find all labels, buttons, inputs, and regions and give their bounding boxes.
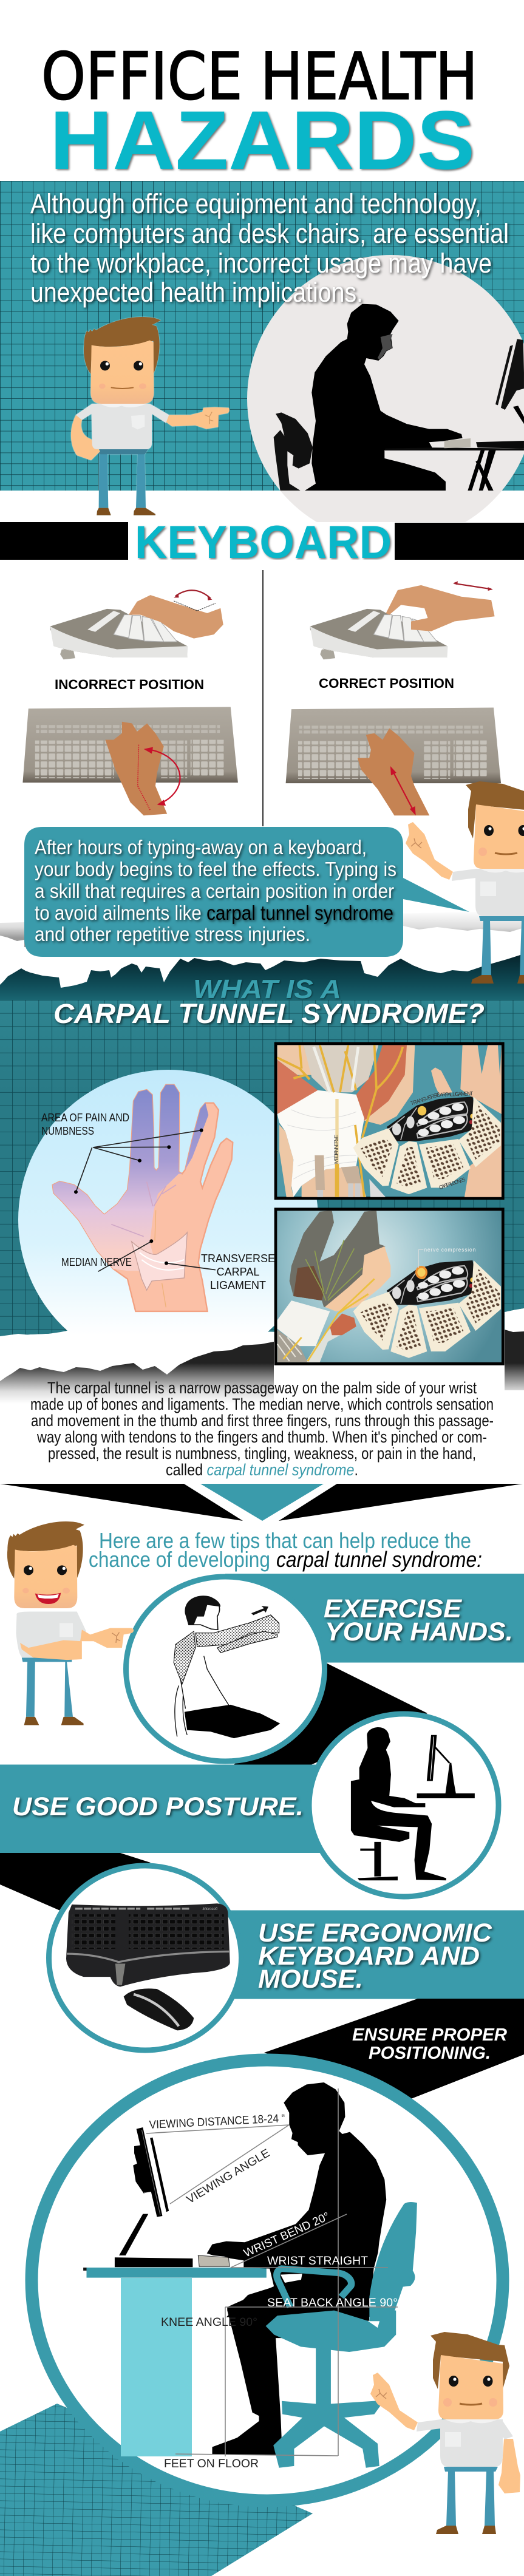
keyboard heading bar	[0, 517, 524, 568]
tip 1 text, second line: YOUR HANDS.	[325, 1617, 513, 1647]
label: correct position: CORRECT POSITION	[319, 676, 454, 691]
label: incorrect position: INCORRECT POSITION	[55, 677, 204, 692]
panel: intro grid	[0, 181, 524, 491]
tip 3 text, second line: KEYBOARD AND	[258, 1942, 480, 1971]
character: smiling man pointing right	[7, 1521, 134, 1725]
callout text: After hours of typing-away on a keyboard,	[35, 836, 367, 858]
label: area of pain and numbness: AREA OF PAIN AND	[41, 1112, 129, 1124]
tips intro text	[89, 1528, 482, 1572]
label: knee angle: KNEE ANGLE 90°	[161, 2316, 257, 2329]
paragraph: what carpal tunnel is	[30, 1379, 494, 1479]
panel: keyboard positions	[22, 570, 501, 826]
heading: what is a: WHAT IS A	[193, 974, 341, 1004]
white torn paper	[0, 1308, 524, 1396]
label: wrist straight: WRIST STRAIGHT	[267, 2255, 368, 2268]
callout text: and other repetitive stress injuries.	[35, 923, 310, 945]
title line: hazards: HAZARDS	[50, 94, 475, 187]
label: transverse carpal ligament: TRANSVERSE	[201, 1252, 275, 1265]
label: seat back angle: SEAT BACK ANGLE 90°	[267, 2297, 398, 2309]
icon: man stretching arms	[174, 1596, 280, 1738]
black banner: ensure proper positioning	[264, 1999, 524, 2099]
chair	[266, 2202, 417, 2468]
label: feet on floor: FEET ON FLOOR	[164, 2458, 259, 2470]
callout text: to avoid ailments like carpal tunnel syndrome	[35, 902, 393, 924]
image: incorrect side view	[50, 590, 223, 659]
diagram: workstation	[83, 2082, 417, 2468]
character: man pointing right	[71, 317, 230, 515]
panel: tip 2 use good posture	[0, 1714, 498, 1897]
black connector between tip 2 and tip 3	[0, 1853, 151, 1911]
photo: wrist anatomy: CARPAL BONES	[438, 1176, 466, 1191]
banner text: ENSURE PROPER	[352, 2025, 507, 2045]
image: correct side view	[310, 581, 495, 659]
character: man pointing up beside callout	[406, 781, 524, 984]
heading: carpal tunnel syndrome: CARPAL TUNNEL SYNDROME?	[53, 998, 485, 1029]
photo: nerve compression	[276, 1209, 503, 1364]
callout text: your body begins to feel the effects. Typing is	[35, 858, 396, 880]
callout text	[35, 836, 396, 945]
measurement lines	[146, 2088, 398, 2456]
label: viewing distance: VIEWING DISTANCE 18-24 “	[149, 2112, 285, 2132]
transverse carpal ligament	[132, 1232, 187, 1290]
label: wrist bend: WRIST BEND 20°	[242, 2210, 332, 2260]
torn paper shadow, upper	[0, 911, 524, 947]
label: viewing angle: VIEWING ANGLE	[185, 2147, 272, 2206]
intro text: unexpected health implications.	[30, 277, 363, 308]
pointer lines	[76, 1130, 216, 1271]
circle background	[18, 1070, 318, 1370]
label: area of pain and numbness: NUMBNESS	[41, 1125, 94, 1137]
tip 2 text: USE GOOD POSTURE.	[12, 1792, 304, 1821]
divider	[262, 570, 264, 826]
panel: tip 1 exercise your hands	[126, 1574, 524, 1761]
photo: wrist anatomy	[276, 1044, 503, 1198]
tip 1 text: EXERCISE	[324, 1594, 462, 1623]
desk and monitor	[83, 2127, 267, 2278]
label: transverse carpal ligament: LIGAMENT	[210, 1279, 266, 1291]
person silhouette	[207, 2082, 386, 2455]
bottom grid background	[0, 2404, 313, 2576]
panel: tip 3 ergonomic keyboard and mouse	[49, 1866, 524, 2050]
panel: proper positioning circle	[32, 2060, 503, 2501]
icon: seated posture silhouette	[351, 1727, 474, 1880]
tips intro text: carpal tunnel syndrome:	[276, 1547, 482, 1572]
icon: ergonomic keyboard: Microsoft	[203, 1908, 217, 1911]
paragraph: what carpal tunnel is: called carpal tunnel syndrome.	[166, 1461, 358, 1479]
desk leg	[121, 2278, 192, 2456]
hand illustration	[53, 1085, 233, 1311]
character: man pointing up, bottom right	[370, 2332, 520, 2534]
image: silhouette of man at computer in circle	[247, 255, 524, 543]
arrow: chevron divider	[0, 1484, 523, 1521]
image: incorrect top view	[22, 707, 238, 815]
intro text	[30, 188, 509, 308]
tip 3 text, third line: MOUSE.	[258, 1965, 363, 1994]
banner text, second line: POSITIONING.	[369, 2044, 491, 2063]
photo: wrist anatomy: CARPAL LIGAMENT	[437, 1090, 474, 1098]
tip 3 text: USE ERGONOMIC	[258, 1918, 492, 1948]
icon: mouse	[124, 1988, 194, 2030]
photo: wrist anatomy: TRANSVERSE	[410, 1091, 441, 1107]
panel: what is carpal tunnel section	[0, 954, 524, 1336]
title	[41, 39, 478, 187]
tips intro text: chance of developing	[89, 1547, 270, 1572]
black connector between tip 1 and tip 2	[234, 1664, 427, 1765]
photo: wrist anatomy: MEDIAN NERVE	[333, 1135, 339, 1164]
callout text: a skill that requires a certain position in order	[35, 880, 394, 902]
torn paper shadow, lower	[0, 1330, 524, 1409]
icon: ergonomic keyboard	[66, 1903, 230, 1986]
diagram: hand with carpal tunnel labels	[18, 1070, 318, 1370]
label: median nerve: MEDIAN NERVE	[61, 1256, 132, 1268]
label: transverse carpal ligament: CARPAL	[217, 1266, 259, 1278]
photo: nerve compression: nerve compression	[424, 1246, 475, 1252]
heading: keyboard: KEYBOARD	[135, 517, 392, 568]
image: correct top view	[286, 707, 501, 815]
tips intro text: Here are a few tips that can help reduce the	[99, 1528, 471, 1553]
callout: after hours of typing	[24, 827, 469, 957]
